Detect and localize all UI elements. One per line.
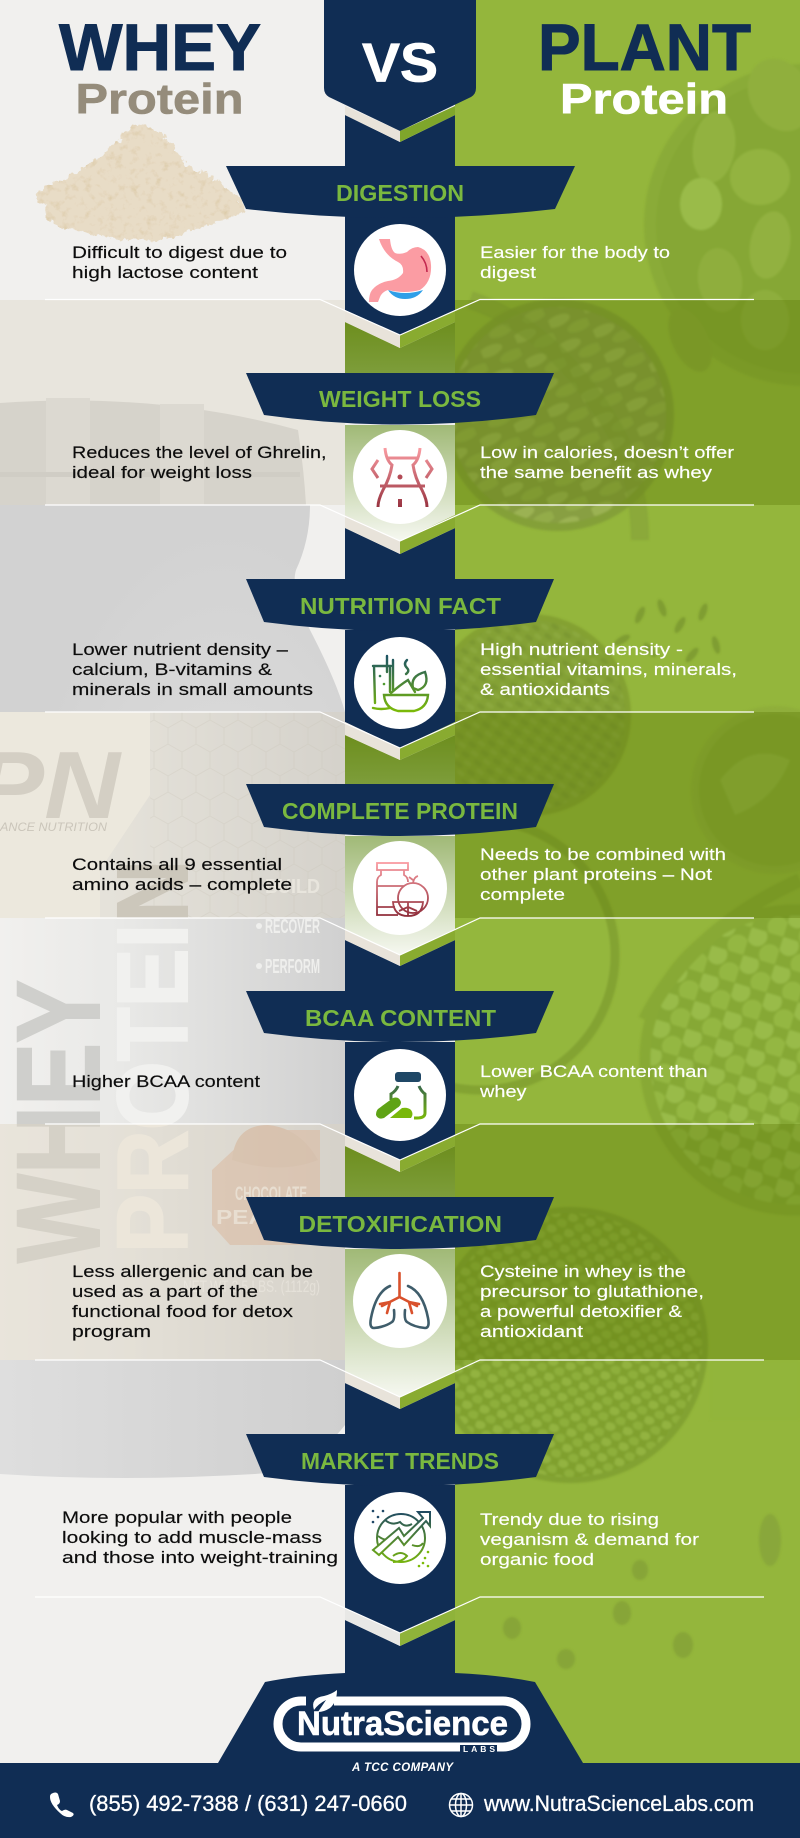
section: market trends: [35, 1434, 764, 1633]
section: market trends: More popular with people: [62, 1508, 292, 1527]
background: whey side with protein tub: PROTEIN: [97, 860, 209, 1253]
section: bcaa content: Higher BCAA content: [72, 1072, 260, 1091]
logo: nutrascience labs: [278, 1690, 526, 1774]
section: market trends: looking to add muscle-mass: [62, 1528, 322, 1547]
footer bar: [0, 1673, 800, 1838]
section: detoxification: DETOXIFICATION: [298, 1211, 502, 1237]
background: whey side with protein tub: PEANUT: [216, 1207, 316, 1229]
section: complete protein: Contains all 9 essential: [72, 855, 282, 874]
title: plant protein: [538, 10, 751, 123]
section: market trends: MARKET TRENDS: [301, 1448, 499, 1474]
section: market trends: organic food: [480, 1550, 594, 1569]
background: whey side with protein tub: PROTEIN: [97, 860, 209, 1253]
icon: phone: [50, 1792, 74, 1817]
center column: connector segments: [345, 115, 455, 1680]
background: whey side with protein tub: BUILD: [265, 876, 320, 898]
background: whey side with protein tub: NET WT 2.5 LBS. (1112g): [183, 1277, 320, 1296]
section: nutrition fact: [45, 579, 754, 748]
section: bcaa content: Lower BCAA content than: [480, 1062, 708, 1081]
image: protein powder pile: [35, 124, 246, 240]
title: whey protein: [59, 10, 261, 123]
section: nutrition fact: essential vitamins, minerals,: [480, 660, 737, 679]
banner: digestion: [226, 166, 575, 218]
section: nutrition fact: calcium, B-vitamins &: [72, 660, 273, 679]
section: complete protein: COMPLETE PROTEIN: [282, 798, 518, 824]
section: detoxification: functional food for detox: [72, 1302, 294, 1321]
section: nutrition fact: NUTRITION FACT: [300, 593, 502, 619]
section: nutrition fact: Lower nutrient density –: [72, 640, 289, 659]
section: bcaa content: [45, 991, 754, 1160]
vs label: VS: [362, 32, 438, 94]
logo: nutrascience labs: LABS: [463, 1744, 495, 1754]
section: bcaa content: whey: [479, 1082, 527, 1101]
section: weight loss: Low in calories, doesn’t offer: [480, 443, 734, 462]
section: digestion: Difficult to digest due to: [72, 243, 287, 262]
section: detoxification: precursor to glutathione,: [480, 1282, 704, 1301]
icon: globe: [450, 1794, 472, 1816]
background: whey side with protein tub: [0, 300, 345, 1478]
section: detoxification: [35, 1197, 764, 1397]
background: whey side with protein tub: RECOVER: [265, 916, 320, 938]
title: whey protein: WHEY: [59, 10, 261, 84]
section: digestion: digest: [480, 263, 536, 282]
section: detoxification: used as a part of the: [72, 1282, 258, 1301]
logo: nutrascience labs: A TCC COMPANY: [351, 1762, 454, 1774]
section: complete protein: [45, 784, 754, 955]
section: bcaa content: BCAA CONTENT: [305, 1005, 497, 1031]
logo: nutrascience labs: NutraScience: [297, 1705, 508, 1743]
section: weight loss: WEIGHT LOSS: [319, 386, 481, 412]
chevron folds: [345, 106, 455, 1646]
background: whey side with protein tub: PERFORM: [265, 956, 320, 978]
phone numbers: (855) 492-7388 / (631) 247-0660: [89, 1791, 407, 1816]
background: whey side with protein tub: CHOCOLATE: [235, 1184, 307, 1205]
background: whey side with protein tub: PROTEIN: [97, 860, 209, 1253]
section: weight loss: ideal for weight loss: [72, 463, 252, 482]
section: market trends: veganism & demand for: [480, 1530, 699, 1549]
section: weight loss: [45, 373, 754, 541]
vs shield: [324, 0, 476, 131]
section: market trends: and those into weight-training: [62, 1548, 338, 1567]
section: nutrition fact: & antioxidants: [480, 680, 610, 699]
background: plant side with bowls of almonds, seeds and peas: [455, 0, 800, 1763]
section: weight loss: Reduces the level of Ghrelin,: [72, 443, 326, 462]
section: detoxification: a powerful detoxifier &: [480, 1302, 683, 1321]
title: whey protein: Protein: [76, 75, 244, 123]
section: digestion: DIGESTION: [336, 180, 464, 206]
section: weight loss: the same benefit as whey: [480, 463, 713, 482]
section: detoxification: antioxidant: [480, 1322, 583, 1341]
section: nutrition fact: High nutrient density -: [480, 640, 683, 659]
section: complete protein: amino acids – complete: [72, 875, 292, 894]
section: complete protein: complete: [480, 885, 565, 904]
section: digestion: high lactose content: [72, 263, 258, 282]
title: plant protein: PLANT: [538, 10, 751, 84]
section: nutrition fact: minerals in small amounts: [72, 680, 313, 699]
title: plant protein: Protein: [560, 75, 728, 123]
section: detoxification: Cysteine in whey is the: [480, 1262, 686, 1281]
section: detoxification: Less allergenic and can be: [72, 1262, 313, 1281]
section: digestion: [45, 166, 754, 335]
website: www.NutraScienceLabs.com: [483, 1791, 754, 1816]
section: complete protein: Needs to be combined with: [480, 845, 726, 864]
section: complete protein: other plant proteins – Not: [480, 865, 712, 884]
section: detoxification: program: [72, 1322, 151, 1341]
background: whey side with protein tub: ANCE NUTRITION: [0, 820, 107, 834]
section: digestion: Easier for the body to: [480, 243, 670, 262]
section: market trends: Trendy due to rising: [480, 1510, 659, 1529]
